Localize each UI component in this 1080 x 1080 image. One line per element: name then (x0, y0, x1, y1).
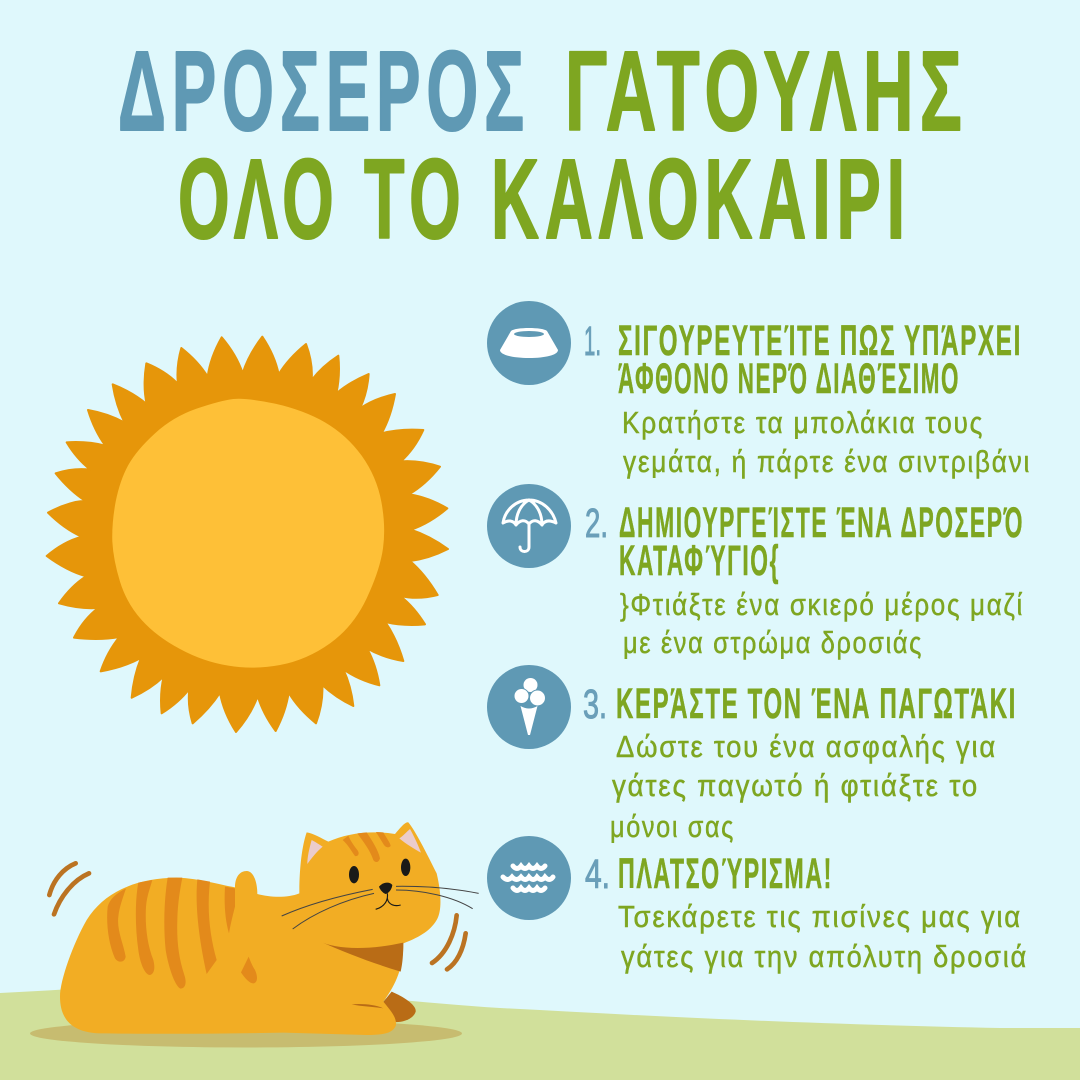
heading 4: ΠΛΑΤΣΟΎΡΙΣΜΑ! (618, 850, 833, 898)
item 3 (487, 665, 1017, 844)
number 2: 2. (585, 500, 608, 546)
text 4: Τσεκάρετε τις πισίνες μας για (618, 899, 1022, 934)
heading 2 (619, 499, 1024, 585)
text 1 (622, 405, 1031, 479)
cat tail (377, 992, 416, 1022)
text 4: γάτες για την απόλυτη δροσιά (621, 939, 1028, 974)
text 1: Κρατήστε τα μπολάκια τους (622, 405, 984, 440)
text 2 (620, 587, 1024, 660)
cat stripes (107, 832, 391, 989)
cat body (60, 822, 440, 1035)
number 4: 4. (585, 851, 610, 897)
cat collar shadow (319, 941, 403, 972)
shadow under cat (30, 1020, 462, 1048)
text 2: με ένα στρώμα δροσιάς (623, 625, 923, 660)
icon: bowl (487, 301, 571, 385)
title: ΔΡΟΣΕΡΟΣ (118, 28, 530, 154)
heading 1 (618, 317, 1022, 403)
text 4 (618, 899, 1028, 974)
icon: sun (47, 337, 448, 732)
icon: umbrella (487, 484, 571, 568)
icon: waves (487, 836, 571, 920)
cat face (282, 859, 479, 929)
item 4 (487, 836, 1028, 974)
ground (0, 985, 1080, 1080)
illustration: cat (49, 822, 479, 1035)
item 1 (487, 301, 1031, 479)
motion lines (49, 863, 466, 969)
text 3: Δώστε του ένα ασφαλής για (616, 729, 997, 764)
icon: ice cream (487, 665, 571, 749)
cat leg crease (352, 1004, 383, 1008)
title (118, 28, 968, 262)
text 3: μόνοι σας (610, 809, 735, 844)
text 3 (610, 729, 997, 844)
cat ears (307, 829, 421, 864)
heading 2: ΚΑΤΑΦΎΓΙΟ{ (619, 537, 780, 585)
number 3: 3. (583, 681, 607, 727)
item 1: 1. (584, 318, 601, 364)
item 2 (487, 484, 1024, 660)
text 3: γάτες παγωτό ή φτιάξτε το (612, 768, 979, 803)
